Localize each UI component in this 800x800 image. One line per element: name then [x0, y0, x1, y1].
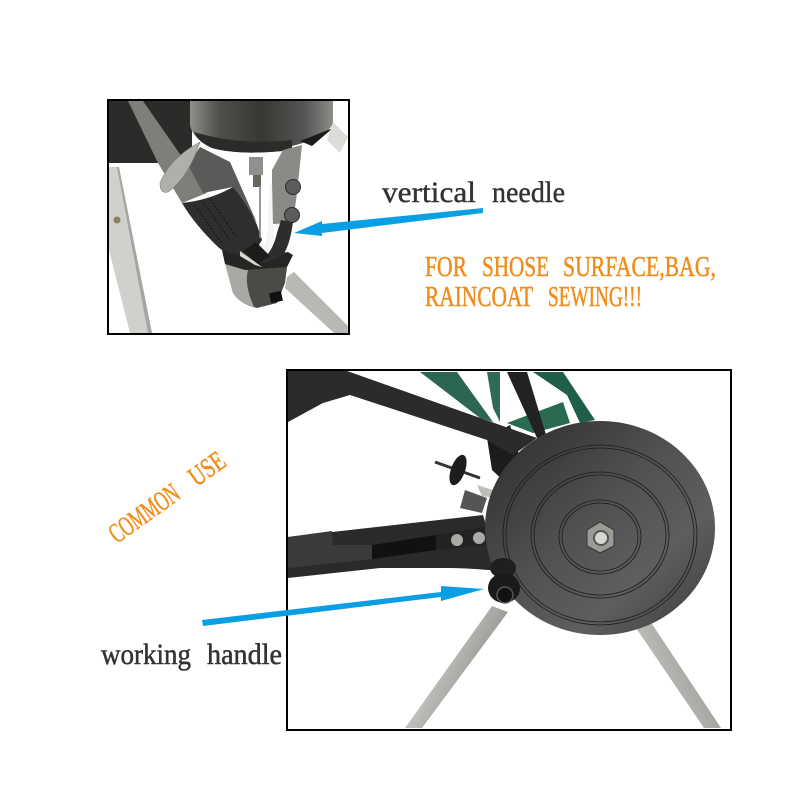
infographic canvas — [100, 99, 732, 731]
green casting — [420, 372, 493, 422]
lower arm — [288, 515, 500, 578]
sewing head cylinder — [190, 101, 333, 153]
thread tension post — [435, 453, 495, 513]
presser foot arm — [272, 145, 302, 224]
rear dark struts — [507, 372, 547, 438]
label: vertical needle: vertical — [382, 176, 476, 209]
handwheel disc — [485, 421, 715, 635]
legs — [405, 606, 508, 728]
foot base — [225, 263, 287, 308]
label: working handle: handle — [207, 638, 282, 671]
panel: vertical needle photo — [108, 100, 349, 334]
upper arm — [288, 371, 537, 455]
callout: common use: COMMON — [103, 478, 186, 550]
callout: use description: SURFACE,BAG, — [563, 251, 716, 283]
callout: use description: SHOSE — [482, 251, 549, 283]
label: vertical needle: needle — [492, 176, 565, 209]
screws — [286, 180, 300, 194]
left support rod — [109, 167, 152, 333]
diagonal arm — [128, 101, 207, 203]
feed dog — [243, 242, 270, 264]
callout: use description: SEWING!!! — [548, 281, 642, 313]
callout: use description: RAINCOAT — [425, 281, 533, 313]
crank handle — [490, 558, 516, 576]
arrow: to vertical needle — [294, 208, 483, 236]
needle — [259, 185, 261, 238]
dark machine frame — [109, 101, 192, 163]
callout: use description: FOR — [425, 251, 467, 283]
callout: common use: USE — [183, 445, 232, 493]
dark band above leather — [188, 147, 257, 223]
leather sample — [182, 187, 262, 258]
presser spoon plate — [160, 142, 200, 192]
wheel grooves — [503, 445, 697, 625]
band wrapping foot — [222, 250, 293, 270]
callout: use description — [425, 251, 716, 313]
needle clamp — [249, 157, 263, 175]
label: vertical needle — [382, 176, 565, 209]
stitched seams — [195, 199, 236, 244]
right bracket behind head — [327, 122, 348, 153]
rear support rod — [285, 272, 348, 333]
label: working handle — [101, 638, 282, 671]
arrow: to working handle — [202, 586, 484, 626]
centre nut — [587, 522, 614, 553]
label: working handle: working — [101, 638, 191, 671]
panel: working handle photo — [287, 370, 731, 730]
